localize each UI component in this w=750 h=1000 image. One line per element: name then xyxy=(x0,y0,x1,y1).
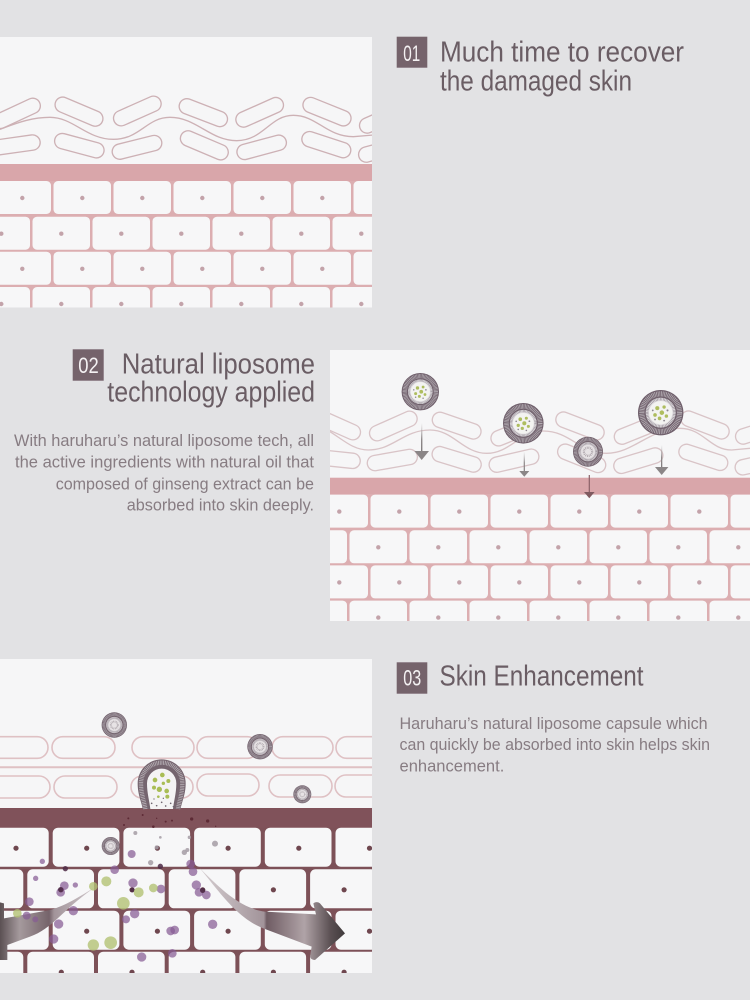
heading 03 xyxy=(397,661,644,694)
green particles xyxy=(13,876,158,951)
text block: skin enhancement description: Haruharu’s natural liposome capsule which xyxy=(400,715,708,733)
liposome 4 xyxy=(638,390,683,435)
heading 02: technology applied xyxy=(107,377,315,409)
arrow 1 xyxy=(414,423,429,460)
liposome 3 xyxy=(573,437,603,467)
upper skin rods and line xyxy=(0,737,400,798)
liposome merging with membrane xyxy=(138,759,186,809)
diffusion arrow right xyxy=(200,868,345,960)
text block: liposome description xyxy=(14,432,314,515)
upper skin rods and wavy line xyxy=(0,94,410,164)
text block: skin enhancement description xyxy=(400,715,710,776)
skin cell grid xyxy=(330,494,750,621)
number badge 02 xyxy=(73,349,104,381)
number badge 02: 02 xyxy=(78,353,99,378)
panel: skin enhancement diagram xyxy=(0,659,372,973)
liposome C xyxy=(293,785,311,803)
absorbed particles xyxy=(13,814,218,962)
panel: liposome absorption diagram xyxy=(330,350,750,621)
membrane particles xyxy=(123,814,216,828)
text block: skin enhancement description: enhancement. xyxy=(400,758,504,776)
arrow 4 xyxy=(655,445,668,475)
dark membrane band xyxy=(0,808,372,828)
heading 03: Skin Enhancement xyxy=(440,661,644,693)
number badge 01: 01 xyxy=(403,41,420,66)
heading 01: the damaged skin xyxy=(440,66,632,98)
number badge 01 xyxy=(397,37,427,68)
dark particles xyxy=(58,864,205,893)
liposome A xyxy=(102,712,127,738)
text block: skin enhancement description: can quickly be absorbed into skin helps skin xyxy=(400,736,710,754)
diffusion arrow left xyxy=(0,890,92,960)
arrow 2 xyxy=(519,452,529,477)
text block: liposome description: composed of ginseng extract can be xyxy=(56,475,314,493)
arrow 3 xyxy=(584,475,595,498)
pink membrane band xyxy=(0,164,372,181)
purple particles xyxy=(23,850,217,962)
liposome D xyxy=(102,837,120,855)
liposome B xyxy=(247,734,273,759)
number badge 03: 03 xyxy=(403,666,421,691)
heading 01: Much time to recover xyxy=(440,36,684,68)
upper skin rods and wavy line xyxy=(309,408,750,477)
heading 02: Natural liposome xyxy=(122,348,315,380)
grey particles xyxy=(133,831,218,865)
number badge 03 xyxy=(397,662,427,694)
text block: liposome description: With haruharu’s natural liposome tech, all xyxy=(14,432,314,450)
panel: damaged skin diagram xyxy=(0,37,372,308)
skin cell grid xyxy=(0,828,372,973)
liposome 2 xyxy=(503,403,544,444)
skin cell grid xyxy=(0,181,372,308)
heading 01 xyxy=(397,36,684,98)
text block: liposome description: absorbed into skin deeply. xyxy=(127,497,314,515)
heading 02 xyxy=(73,348,315,409)
pink membrane band xyxy=(330,478,750,495)
liposome 1 xyxy=(402,373,439,410)
text block: liposome description: the active ingredients with natural oil that xyxy=(15,454,314,472)
